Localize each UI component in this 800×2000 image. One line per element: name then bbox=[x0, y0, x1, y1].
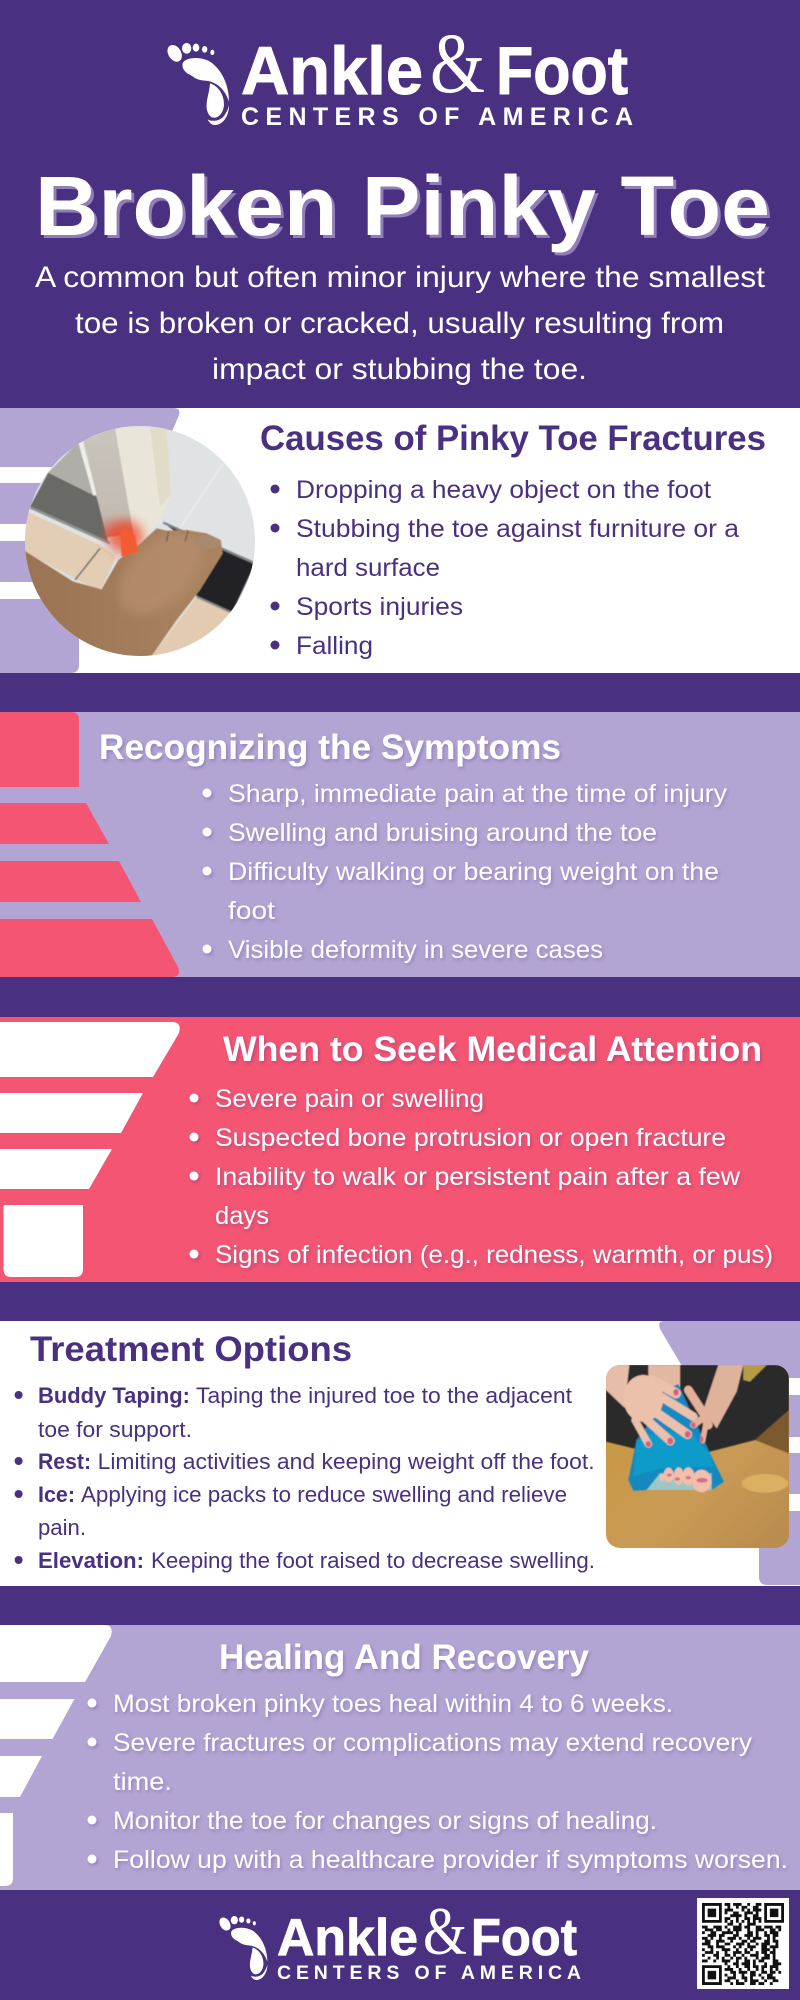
title: Broken Pinky Toe bbox=[35, 159, 770, 253]
bullet list: Inability to walk or persistent pain after a few bbox=[215, 1163, 741, 1191]
bullet list: Keeping the foot raised to decrease swelling. bbox=[151, 1548, 595, 1573]
intro text bbox=[35, 261, 766, 386]
panel: healing and recovery bbox=[0, 1625, 800, 1890]
panel: causes bbox=[0, 408, 800, 673]
bullet list bbox=[270, 476, 739, 660]
bullet list: Follow up with a healthcare provider if symptoms worsen. bbox=[113, 1846, 788, 1874]
bullet list: Sports injuries bbox=[296, 593, 463, 621]
footer logo bbox=[217, 1893, 581, 1984]
heading: Healing And Recovery bbox=[219, 1638, 590, 1677]
bullet list: Falling bbox=[296, 632, 373, 660]
bullet list bbox=[88, 1690, 788, 1874]
bullet list: Taping the injured toe to the adjacent bbox=[196, 1383, 572, 1408]
panel: symptoms bbox=[0, 712, 800, 977]
side shapes bbox=[0, 408, 179, 673]
bullet list: Applying ice packs to reduce swelling and relieve bbox=[81, 1482, 567, 1507]
logo wordmark bbox=[241, 15, 633, 131]
bullet list: days bbox=[215, 1202, 269, 1230]
intro text: A common but often minor injury where the smallest bbox=[35, 261, 766, 294]
bullet list: foot bbox=[228, 897, 275, 925]
QR code bbox=[697, 1898, 789, 1989]
bullet list: pain. bbox=[38, 1515, 86, 1540]
side shapes bbox=[0, 1625, 112, 1886]
bullet list: toe for support. bbox=[38, 1417, 192, 1442]
bullet list: Rest: bbox=[38, 1449, 91, 1474]
icon: footprint bbox=[165, 42, 229, 125]
bullet list: Severe pain or swelling bbox=[215, 1085, 484, 1113]
logo wordmark: Foot bbox=[471, 1909, 577, 1967]
bullet list: Swelling and bruising around the toe bbox=[228, 819, 657, 847]
bullet list: Suspected bone protrusion or open fracture bbox=[215, 1124, 726, 1152]
heading: Recognizing the Symptoms bbox=[99, 728, 561, 767]
bullet list bbox=[190, 1085, 773, 1269]
logo wordmark: CENTERS OF AMERICA bbox=[277, 1962, 581, 1984]
logo wordmark bbox=[277, 1893, 581, 1984]
logo wordmark: Ankle bbox=[277, 1909, 418, 1967]
logo wordmark: CENTERS OF AMERICA bbox=[241, 103, 633, 131]
side shapes bbox=[0, 1022, 180, 1277]
bullet list bbox=[15, 1383, 595, 1573]
logo wordmark: Foot bbox=[496, 33, 628, 109]
bullet list: Dropping a heavy object on the foot bbox=[296, 476, 711, 504]
photo: stubbed toe bbox=[23, 426, 255, 658]
side shapes bbox=[0, 712, 179, 977]
bullet list: Limiting activities and keeping weight off the foot. bbox=[98, 1449, 595, 1474]
bullet list: Monitor the toe for changes or signs of healing. bbox=[113, 1807, 657, 1835]
panel: treatment options bbox=[0, 1321, 800, 1586]
bullet list: Difficulty walking or bearing weight on the bbox=[228, 858, 719, 886]
intro text: toe is broken or cracked, usually resulting from bbox=[75, 307, 724, 340]
bullet list: Sharp, immediate pain at the time of injury bbox=[228, 780, 728, 808]
panel: when to seek medical attention bbox=[0, 1017, 800, 1282]
side shapes bbox=[659, 1321, 800, 1585]
heading: Causes of Pinky Toe Fractures bbox=[260, 419, 766, 458]
logo wordmark: & bbox=[423, 1893, 467, 1969]
icon: footprint bbox=[217, 1915, 267, 1980]
heading: When to Seek Medical Attention bbox=[223, 1030, 762, 1069]
bullet list: Ice: bbox=[38, 1482, 75, 1507]
bullet list: time. bbox=[113, 1768, 172, 1796]
photo: ice pack on foot bbox=[606, 1365, 789, 1548]
heading: Treatment Options bbox=[30, 1330, 352, 1369]
bullet list: Buddy Taping: bbox=[38, 1383, 190, 1408]
bullet list bbox=[202, 780, 728, 964]
bullet list: Most broken pinky toes heal within 4 to 6 weeks. bbox=[113, 1690, 673, 1718]
bullet list: Severe fractures or complications may extend recovery bbox=[113, 1729, 753, 1757]
bullet list: hard surface bbox=[296, 554, 440, 582]
intro text: impact or stubbing the toe. bbox=[212, 353, 587, 386]
bullet list: Signs of infection (e.g., redness, warmth, or pus) bbox=[215, 1241, 773, 1269]
logo wordmark: Ankle bbox=[241, 33, 423, 109]
logo wordmark: & bbox=[430, 15, 485, 111]
bullet list: Elevation: bbox=[38, 1548, 144, 1573]
bullet list: Stubbing the toe against furniture or a bbox=[296, 515, 739, 543]
bullet list: Visible deformity in severe cases bbox=[228, 936, 603, 964]
header logo bbox=[165, 15, 633, 131]
